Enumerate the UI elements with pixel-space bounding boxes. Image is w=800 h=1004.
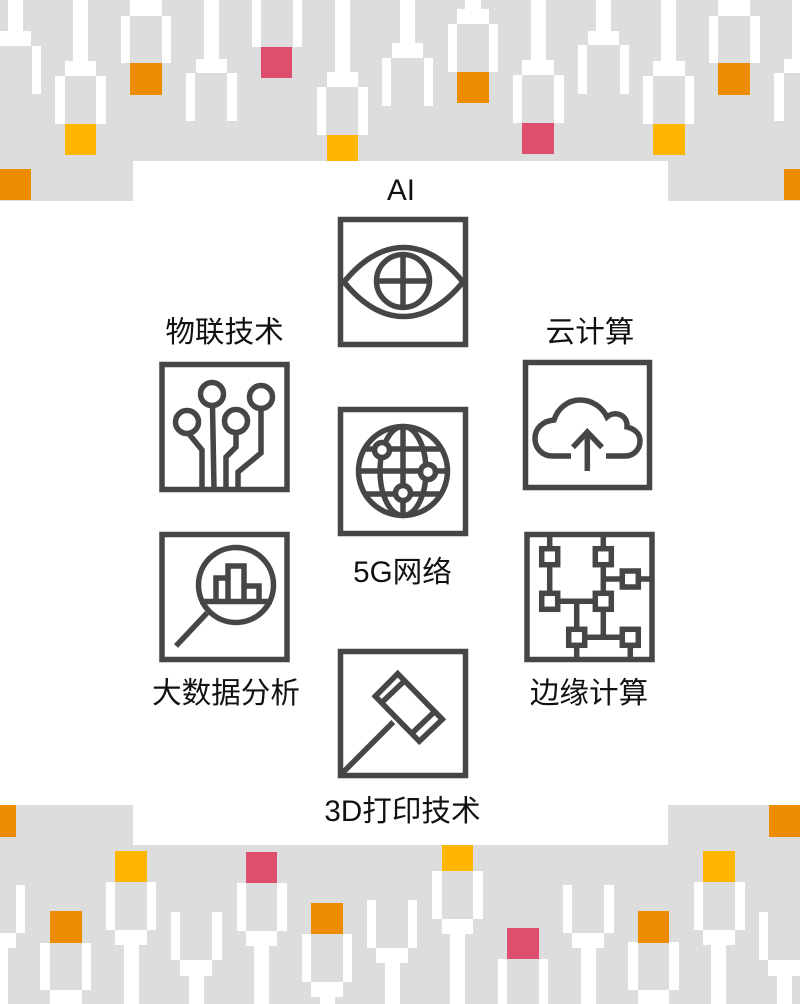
connector b with orange tip xyxy=(40,911,91,1004)
icon: edge network xyxy=(527,534,652,660)
connector 7 xyxy=(382,0,433,106)
connector c with yellow tip xyxy=(106,851,156,1004)
connector 2 with yellow tip xyxy=(55,0,106,155)
orange square right xyxy=(769,805,800,837)
connector 3 with orange tip xyxy=(121,0,171,95)
connector 11 with yellow tip xyxy=(643,0,694,155)
label: IoT: 物联技术 xyxy=(165,316,284,349)
orange square left xyxy=(0,805,16,837)
orange square right xyxy=(784,169,800,200)
connector 12 with orange tip xyxy=(709,0,760,95)
connector g xyxy=(367,900,417,1004)
connector 6 with yellow tip xyxy=(317,0,368,161)
connector e with pink tip xyxy=(237,852,287,1004)
connector a xyxy=(0,885,25,1004)
label: AI: AI xyxy=(387,174,415,207)
connector i with pink tip xyxy=(498,928,548,1004)
connector 4 xyxy=(186,0,237,121)
panel: bottom connector pattern xyxy=(0,805,800,1004)
connector d xyxy=(171,912,222,1004)
panel: top connector pattern xyxy=(0,0,800,201)
icon: globe network xyxy=(340,410,466,534)
label: cloud computing: 云计算 xyxy=(546,316,634,349)
connector 5 with pink tip xyxy=(252,0,302,78)
connector m xyxy=(759,912,800,1004)
icon: circuit nodes xyxy=(162,364,287,490)
connector j xyxy=(563,885,614,1004)
connector k with orange tip xyxy=(628,911,679,1004)
connector 1 xyxy=(0,0,41,94)
icon: magnifier with bars xyxy=(162,534,287,660)
icon: cloud upload xyxy=(526,362,650,488)
connector h with yellow tip xyxy=(432,845,483,1004)
connector f with orange tip xyxy=(302,903,352,1004)
connector 13 xyxy=(774,0,800,121)
icon: eye xyxy=(340,220,466,344)
label: 5G network: 5G网络 xyxy=(353,556,452,589)
icon: hammer xyxy=(340,652,466,776)
connector 8 with orange tip xyxy=(448,0,498,103)
label: edge computing: 边缘计算 xyxy=(530,677,648,710)
connector l with yellow tip xyxy=(694,851,745,1004)
label: 3D printing: 3D打印技术 xyxy=(324,795,481,828)
connector 9 with pink tip xyxy=(513,0,564,154)
connector 10 xyxy=(578,0,629,94)
orange square left xyxy=(0,169,31,200)
label: big data analysis: 大数据分析 xyxy=(152,677,300,710)
network nodes xyxy=(374,442,436,500)
edge nodes xyxy=(542,549,638,645)
